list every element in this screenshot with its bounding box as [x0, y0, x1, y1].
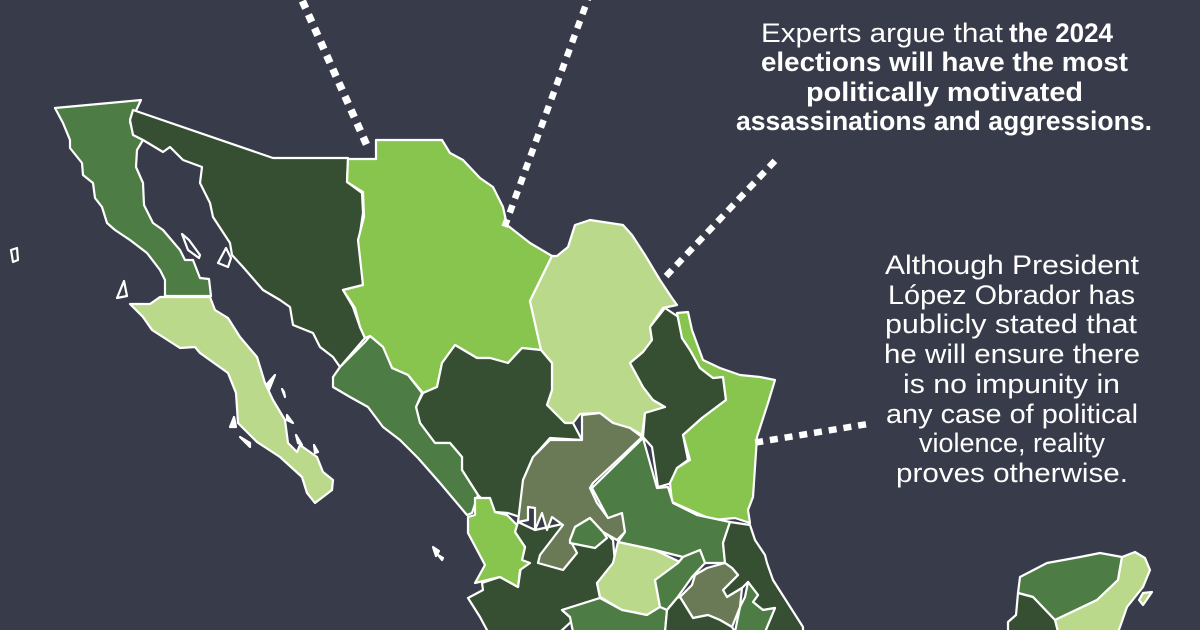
- state: Quintana Roo: [1055, 552, 1150, 630]
- text: president statement: proves otherwise.: [896, 458, 1128, 488]
- islands: [11, 234, 1152, 605]
- state: Mexico: [665, 597, 735, 630]
- state: Veracruz: [723, 522, 803, 630]
- text: president statement: publicly stated that: [885, 309, 1138, 339]
- state: Yucatan: [1018, 553, 1122, 620]
- state: Tamaulipas: [670, 312, 775, 523]
- state: Sonora: [130, 110, 365, 367]
- state: Chihuahua: [343, 140, 552, 393]
- text: experts argue: [736, 18, 1152, 136]
- text: president statement: violence, reality: [919, 428, 1105, 458]
- state: Durango: [416, 345, 582, 517]
- text: president statement: Although President: [885, 250, 1140, 280]
- state: Campeche: [1008, 593, 1058, 630]
- state: Coahuila: [530, 220, 677, 435]
- state: Michoacan: [562, 598, 667, 630]
- text: president statement: is no impunity in: [903, 369, 1120, 399]
- map of Mexico: [11, 100, 1152, 630]
- dotted line 4: [755, 424, 866, 443]
- state: Jalisco: [468, 518, 615, 630]
- text: president statement: López Obrador has: [888, 280, 1135, 310]
- state: Sinaloa: [333, 336, 478, 515]
- state: San Luis Potosi: [592, 438, 730, 563]
- text: experts argue: elections will have the most: [761, 47, 1128, 77]
- text: president statement: he will ensure there: [884, 339, 1140, 369]
- state: Queretaro: [655, 550, 705, 610]
- state: Nuevo Leon: [630, 308, 726, 487]
- text: experts argue: assassinations and aggressions.: [736, 106, 1152, 136]
- state: Baja California: [55, 100, 211, 296]
- state: Baja California Sur: [130, 297, 333, 503]
- state: Hidalgo: [680, 563, 742, 627]
- state: Nayarit: [468, 498, 530, 587]
- text: president statement: any case of political: [886, 399, 1138, 429]
- dotted line 3: [666, 161, 775, 276]
- text: experts argue: the 2024: [1009, 18, 1113, 48]
- text: experts argue: politically motivated: [806, 77, 1083, 107]
- text: president statement: [884, 250, 1140, 488]
- dotted line 1: [302, 1, 367, 145]
- state: Aguascalientes: [570, 518, 607, 548]
- state: Guanajuato: [597, 542, 682, 615]
- state: Puebla: [735, 582, 775, 630]
- text: experts argue: Experts argue that: [761, 18, 1004, 48]
- state: Zacatecas: [518, 413, 642, 570]
- dotted line 2: [505, 0, 590, 227]
